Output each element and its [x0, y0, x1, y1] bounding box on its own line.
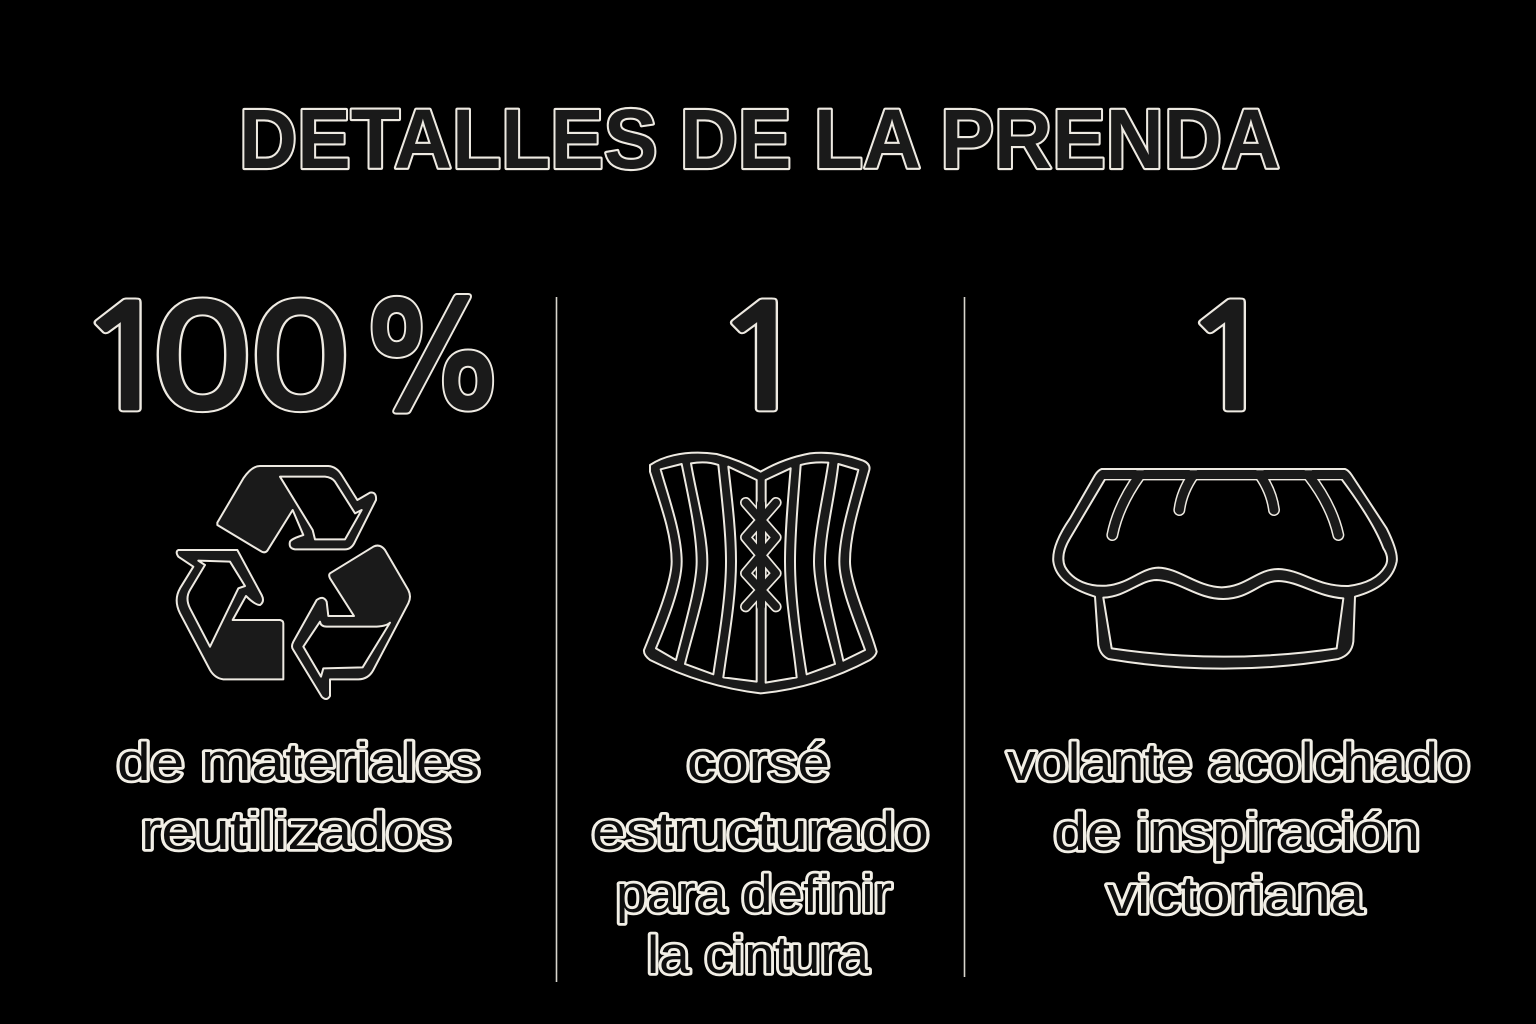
panel: materials: [74, 287, 508, 861]
caption: corset: [592, 733, 929, 985]
caption: corset: para definir: [616, 865, 892, 924]
pleats: [1103, 470, 1343, 535]
title: DETALLES DE LA PRENDA: [239, 92, 1280, 186]
stat: 1 ruffle: 1: [1178, 287, 1283, 432]
caption: ruffle: de inspiración: [1054, 803, 1420, 862]
stat: 1 corset: 1: [710, 287, 815, 432]
caption: ruffle: volante acolchado: [1007, 733, 1470, 792]
divider left: [556, 297, 558, 982]
stat: 100 percent: [74, 287, 508, 432]
icon: recycling arrows: [177, 466, 410, 699]
caption: corset: estructurado: [592, 802, 929, 861]
caption: materials: de materiales: [117, 733, 480, 792]
icon: quilted ruffle: [1053, 469, 1397, 669]
caption: materials: [117, 733, 480, 861]
caption: corset: la cintura: [647, 926, 870, 985]
caption: corset: corsé: [687, 733, 830, 792]
lacing: [746, 503, 776, 607]
caption: materials: reutilizados: [141, 802, 451, 861]
caption: ruffle: victoriana: [1107, 866, 1365, 925]
divider right: [964, 297, 966, 977]
stat: 100 percent: %: [357, 287, 508, 432]
panel: corset: [592, 287, 929, 985]
caption: ruffle: [1007, 733, 1470, 925]
stat: 100 percent: 100: [74, 287, 353, 432]
panel: ruffle: [1007, 287, 1470, 925]
icon: corset: [644, 453, 877, 693]
